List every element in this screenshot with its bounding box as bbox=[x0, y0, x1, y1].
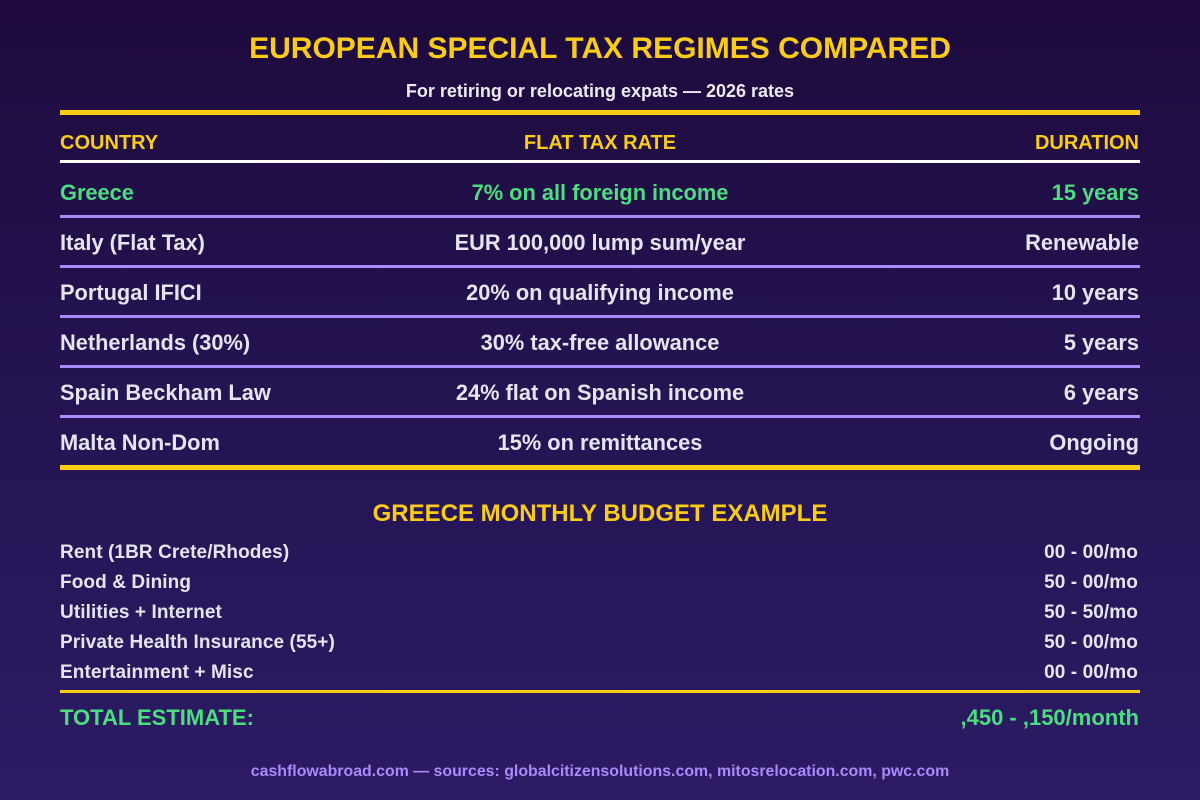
row: Spain bbox=[60, 380, 1139, 405]
row: Malta: Malta Non-Dom bbox=[60, 430, 220, 455]
row: Italy: EUR 100,000 lump sum/year bbox=[455, 230, 745, 255]
row: Italy: Renewable bbox=[1025, 230, 1139, 255]
subtitle: For retiring or relocating expats — 2026 rates bbox=[406, 81, 794, 101]
table: tax regimes bbox=[60, 180, 1139, 455]
budget: utilities: Utilities + Internet bbox=[60, 602, 222, 623]
row: Italy bbox=[60, 230, 1139, 255]
budget: utilities: 50 - 50/mo bbox=[1044, 602, 1138, 623]
row: Greece: Greece bbox=[60, 180, 134, 205]
row: Portugal: 10 years bbox=[1052, 280, 1139, 305]
row: Netherlands bbox=[60, 330, 1139, 355]
row: Spain: Spain Beckham Law bbox=[60, 380, 271, 405]
total estimate bbox=[60, 705, 1139, 730]
table header: COUNTRY bbox=[60, 132, 158, 154]
row: Netherlands: Netherlands (30%) bbox=[60, 330, 250, 355]
budget: entertainment bbox=[60, 662, 1138, 683]
budget: health: Private Health Insurance (55+) bbox=[60, 632, 335, 653]
budget: rent: Rent (1BR Crete/Rhodes) bbox=[60, 542, 289, 563]
table header: FLAT TAX RATE bbox=[524, 132, 676, 154]
row: Malta: 15% on remittances bbox=[498, 430, 702, 455]
budget: food: 50 - 00/mo bbox=[1044, 572, 1138, 593]
budget: food: Food & Dining bbox=[60, 572, 191, 593]
row: Portugal: Portugal IFICI bbox=[60, 280, 202, 305]
table header: DURATION bbox=[1035, 132, 1139, 154]
row: Portugal: 20% on qualifying income bbox=[466, 280, 734, 305]
title: EUROPEAN SPECIAL TAX REGIMES COMPARED bbox=[249, 32, 951, 65]
row: Greece: 15 years bbox=[1052, 180, 1139, 205]
row: Spain: 6 years bbox=[1064, 380, 1139, 405]
table header bbox=[60, 132, 1139, 154]
row: Greece bbox=[60, 180, 1139, 205]
budget: utilities bbox=[60, 602, 1138, 623]
budget list bbox=[60, 542, 1138, 683]
row: Netherlands: 30% tax-free allowance bbox=[481, 330, 719, 355]
footer sources: cashflowabroad.com — sources: globalcitizensolutions.com, mitosrelocation.com, pwc.com bbox=[251, 763, 949, 780]
budget: entertainment: Entertainment + Misc bbox=[60, 662, 254, 683]
budget: rent: 00 - 00/mo bbox=[1044, 542, 1138, 563]
budget: food bbox=[60, 572, 1138, 593]
row: Greece: 7% on all foreign income bbox=[472, 180, 728, 205]
budget: health bbox=[60, 632, 1138, 653]
total estimate: TOTAL ESTIMATE: bbox=[60, 705, 254, 730]
total estimate: ,450 - ,150/month bbox=[960, 705, 1139, 730]
budget heading: GREECE MONTHLY BUDGET EXAMPLE bbox=[373, 500, 827, 527]
row: Malta bbox=[60, 430, 1139, 455]
row: Netherlands: 5 years bbox=[1064, 330, 1139, 355]
budget: entertainment: 00 - 00/mo bbox=[1044, 662, 1138, 683]
row: Portugal bbox=[60, 280, 1139, 305]
row: Spain: 24% flat on Spanish income bbox=[456, 380, 744, 405]
budget: health: 50 - 00/mo bbox=[1044, 632, 1138, 653]
budget: rent bbox=[60, 542, 1138, 563]
row: Malta: Ongoing bbox=[1049, 430, 1139, 455]
row: Italy: Italy (Flat Tax) bbox=[60, 230, 205, 255]
